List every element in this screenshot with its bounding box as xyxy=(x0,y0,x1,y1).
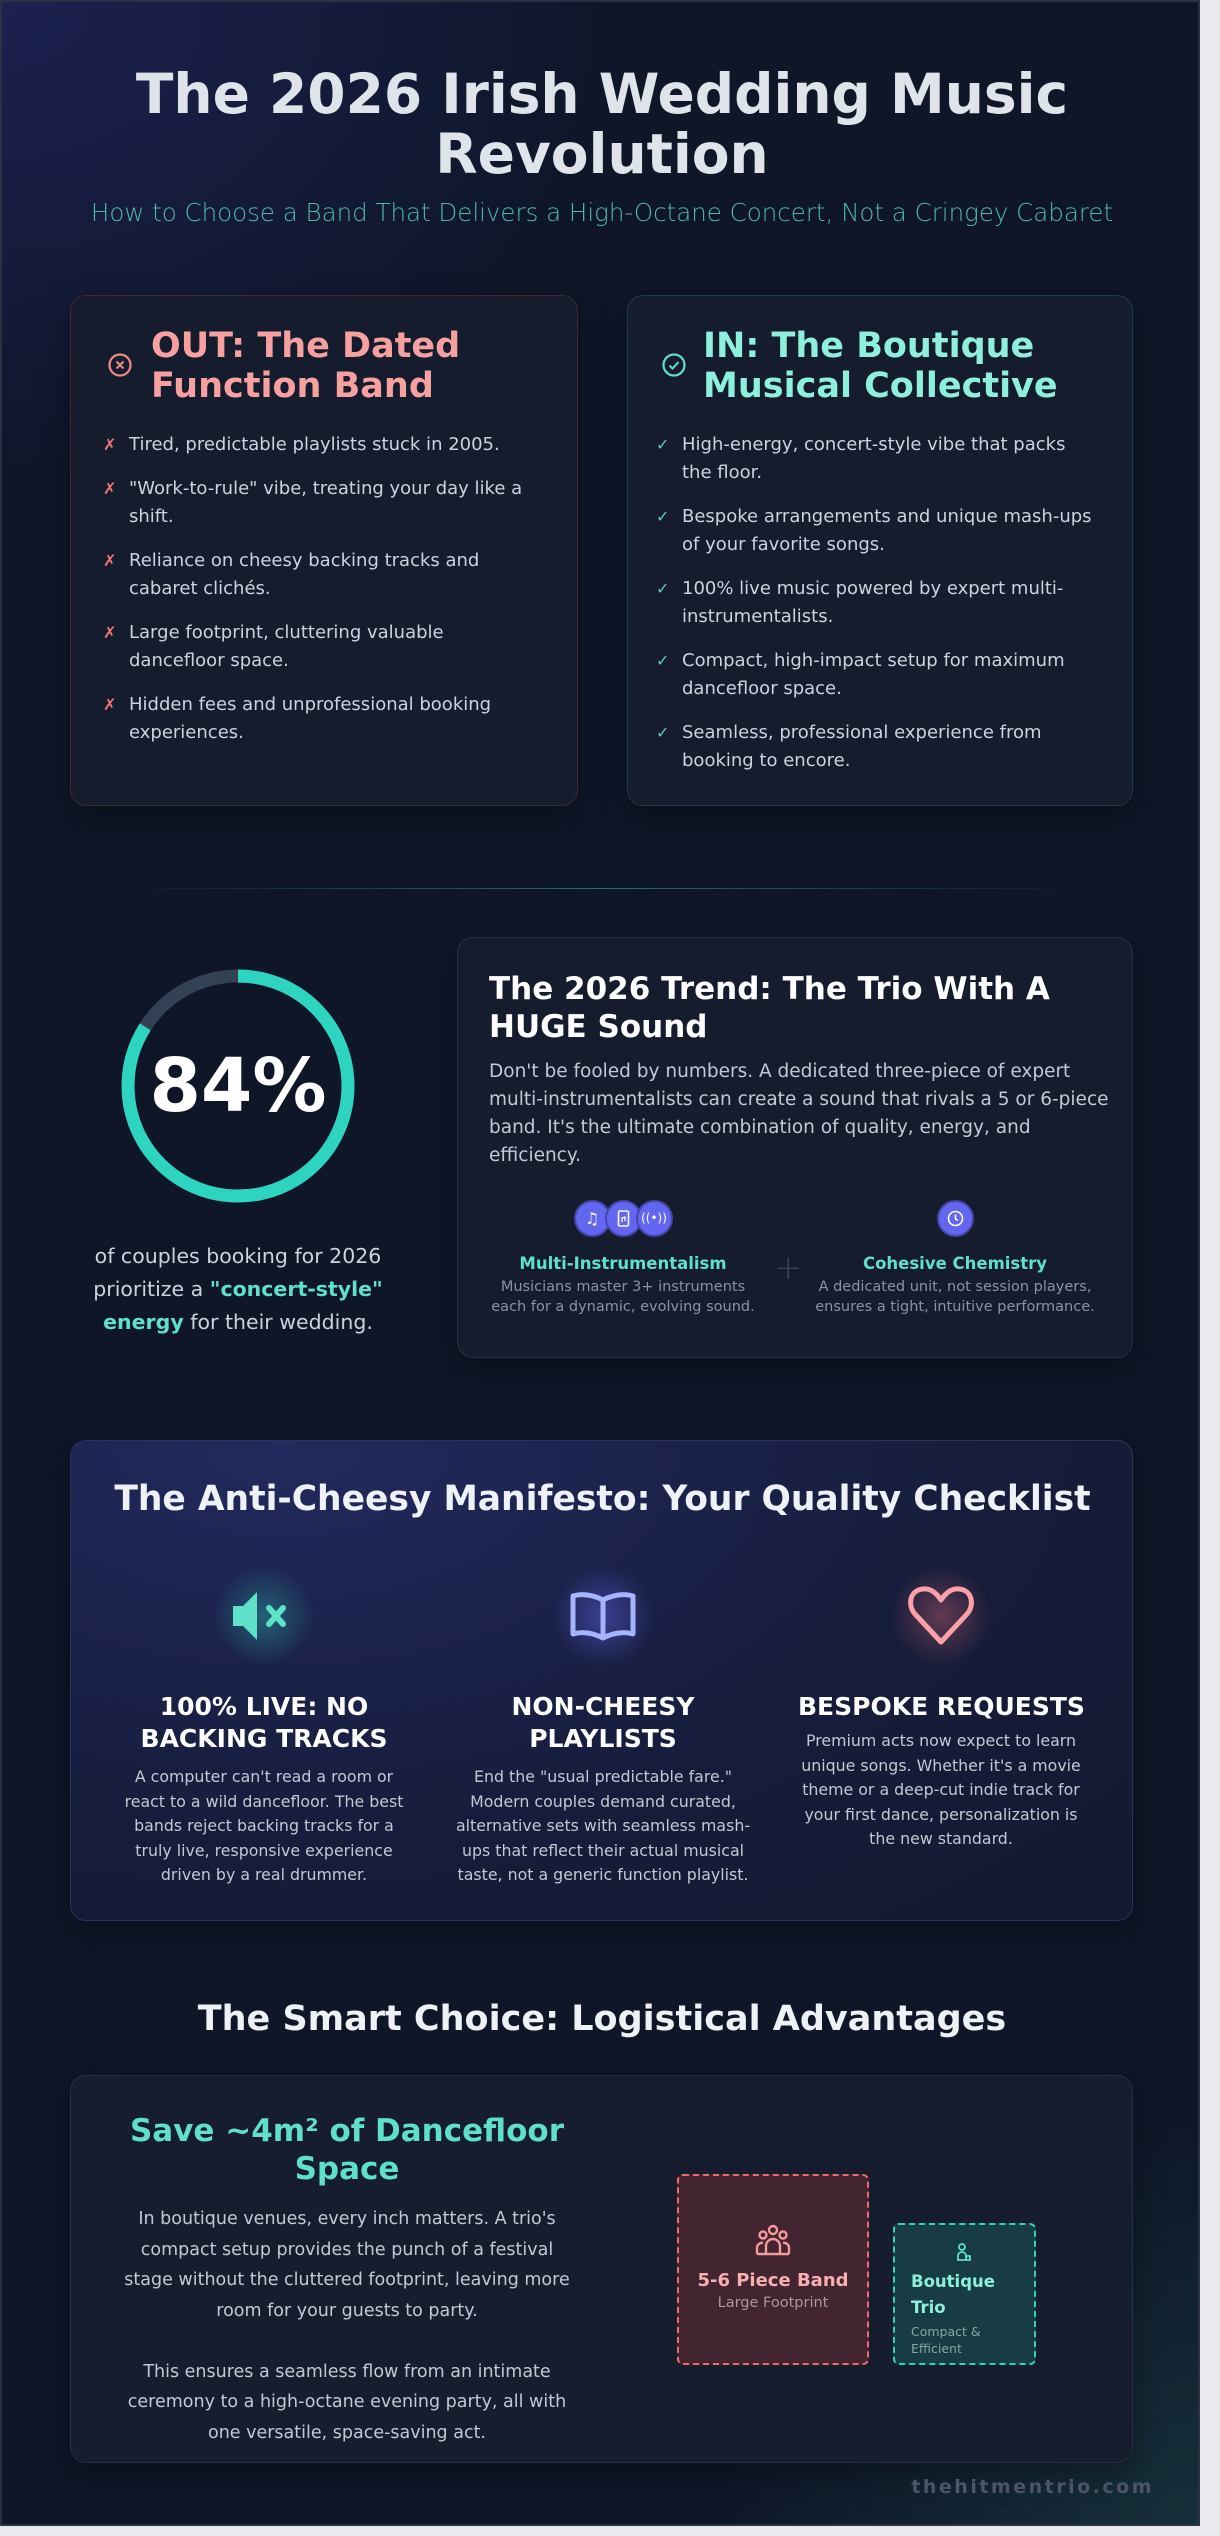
icon: open book xyxy=(548,1561,658,1671)
list: out: ✗ xyxy=(103,435,116,454)
feature: multi-instrumentalism: Musicians master 3+ instruments each for a dynamic, evolving sound. xyxy=(491,1279,755,1315)
heading: in: Musical Collective xyxy=(703,366,1058,406)
feature: chemistry: Cohesive Chemistry xyxy=(863,1254,1047,1273)
diagram: large band footprint: Large Footprint xyxy=(718,2295,828,2311)
list: in: ✓ xyxy=(656,651,669,670)
icon: check circle xyxy=(662,353,686,377)
diagram: large band footprint xyxy=(677,2174,869,2365)
diagram: trio footprint xyxy=(893,2223,1036,2365)
manifesto heading: The Anti-Cheesy Manifesto: Your Quality Checklist xyxy=(114,1479,1091,1519)
icons: instruments xyxy=(574,1200,673,1237)
title xyxy=(136,62,1068,186)
column: live: A computer can't read a room or react to a wild dancefloor. The best bands reject backing tracks for a truly live, responsive experience driven by a real drummer. xyxy=(125,1767,403,1884)
icons: instruments: ♫ xyxy=(585,1209,599,1228)
list: out xyxy=(103,434,522,743)
list: out: ✗ xyxy=(103,551,116,570)
list: out: Large footprint, cluttering valuable dancefloor space. xyxy=(129,622,444,671)
icon: muted speaker xyxy=(209,1561,319,1671)
panel: in xyxy=(627,295,1133,806)
list: in: High-energy, concert-style vibe that packs the floor. xyxy=(682,434,1065,483)
feature: multi-instrumentalism: Multi-Instrumentalism xyxy=(519,1254,727,1273)
icon: heart xyxy=(886,1561,996,1671)
list: out: ✗ xyxy=(103,623,116,642)
column: playlists xyxy=(456,1571,750,1884)
logistics text xyxy=(124,2209,570,2442)
list: out: Hidden fees and unprofessional booking experiences. xyxy=(129,694,491,743)
list: out: ✗ xyxy=(103,479,116,498)
feature: chemistry xyxy=(815,1200,1095,1315)
list: in: 100% live music powered by expert multi-instrumentalists. xyxy=(682,578,1063,627)
trend heading: The 2026 Trend: The Trio With A HUGE Sound xyxy=(489,971,1050,1045)
column: bespoke: Premium acts now expect to learn unique songs. Whether it's a movie theme or a deep-cut indie track for your first dance, personalization is the new standard. xyxy=(801,1731,1081,1848)
logistics text: This ensures a seamless flow from an intimate ceremony to a high-octane evening party, all with one versatile, space-saving act. xyxy=(128,2362,566,2442)
heading: in xyxy=(703,326,1058,406)
list: in: ✓ xyxy=(656,723,669,742)
panel: trend xyxy=(457,937,1133,1358)
diagram: trio footprint: Trio xyxy=(911,2298,946,2317)
column: bespoke: BESPOKE REQUESTS xyxy=(798,1692,1085,1721)
panel: logistics xyxy=(70,2075,1133,2463)
plus sign: + xyxy=(774,1248,802,1288)
chart: 84% ring xyxy=(122,970,354,1202)
trend body: Don't be fooled by numbers. A dedicated three-piece of expert multi-instrumentalists can create a sound that rivals a 5 or 6-piece band. It's the ultimate combination of quality, energy, and efficiency. xyxy=(489,1061,1108,1166)
feature: multi-instrumentalism xyxy=(491,1200,755,1315)
heading: smart choice: The Smart Choice: Logistical Advantages xyxy=(198,1999,1006,2039)
diagram: trio footprint: Boutique xyxy=(911,2272,995,2291)
list: in: Compact, high-impact setup for maximum dancefloor space. xyxy=(682,650,1065,699)
list: in: ✓ xyxy=(656,435,669,454)
list: in: Bespoke arrangements and unique mash‑ups of your favorite songs. xyxy=(682,506,1092,555)
heading: out: Function Band xyxy=(151,366,434,406)
diagram: trio footprint: Compact & xyxy=(911,2324,981,2339)
list: out: Reliance on cheesy backing tracks and cabaret clichés. xyxy=(129,550,479,599)
diagram: trio footprint: Efficient xyxy=(911,2341,962,2356)
list: in: ✓ xyxy=(656,507,669,526)
column: playlists: End the "usual predictable fare." Modern couples demand curated, alternative sets with seamless mash-ups that reflect their actual musical taste, not a generic function playlist. xyxy=(456,1767,750,1884)
logistics text: In boutique venues, every inch matters. A trio's compact setup provides the punch of a festival stage without the cluttered footprint, leaving more room for your guests to party. xyxy=(124,2209,570,2320)
icon: group xyxy=(756,2224,790,2256)
footer: website: thehitmentrio.com xyxy=(911,2476,1154,2498)
feature: chemistry: A dedicated unit, not session players, ensures a tight, intuitive performance. xyxy=(815,1279,1095,1315)
list: in xyxy=(656,434,1092,771)
heading: out: OUT: The Dated xyxy=(151,326,460,366)
heading: out xyxy=(151,326,460,406)
column: live: 100% LIVE: NO BACKING TRACKS xyxy=(141,1692,387,1753)
panel: out xyxy=(70,295,578,806)
column: playlists: NON-CHEESY PLAYLISTS xyxy=(511,1692,694,1753)
icons: instruments: ((•)) xyxy=(641,1211,667,1225)
icon: person xyxy=(957,2243,971,2261)
column: bespoke xyxy=(798,1571,1085,1848)
diagram: large band footprint: 5-6 Piece Band xyxy=(697,2270,849,2291)
list: out: ✗ xyxy=(103,695,116,714)
column: live xyxy=(125,1572,404,1884)
icon: clock xyxy=(936,1200,974,1237)
stat caption: of couples booking for 2026 prioritize a "concert-style" energy for their wedding. xyxy=(93,1244,383,1334)
list: out: "Work-to-rule" vibe, treating your day like a shift. xyxy=(129,478,522,527)
stat number: 84% xyxy=(149,1043,327,1129)
list: out: Tired, predictable playlists stuck in 2005. xyxy=(129,434,500,455)
title: The 2026 Irish Wedding Music xyxy=(136,62,1068,126)
subtitle: How to Choose a Band That Delivers a High-Octane Concert, Not a Cringey Cabaret xyxy=(91,198,1113,227)
panel: manifesto xyxy=(70,1440,1133,1921)
logistics heading: Save ~4m² of Dancefloor Space xyxy=(130,2113,564,2187)
title: Revolution xyxy=(435,122,769,186)
list: in: Seamless, professional experience from booking to encore. xyxy=(682,722,1042,771)
icon: x circle xyxy=(108,353,132,377)
heading: in: IN: The Boutique xyxy=(703,326,1034,366)
list: in: ✓ xyxy=(656,579,669,598)
